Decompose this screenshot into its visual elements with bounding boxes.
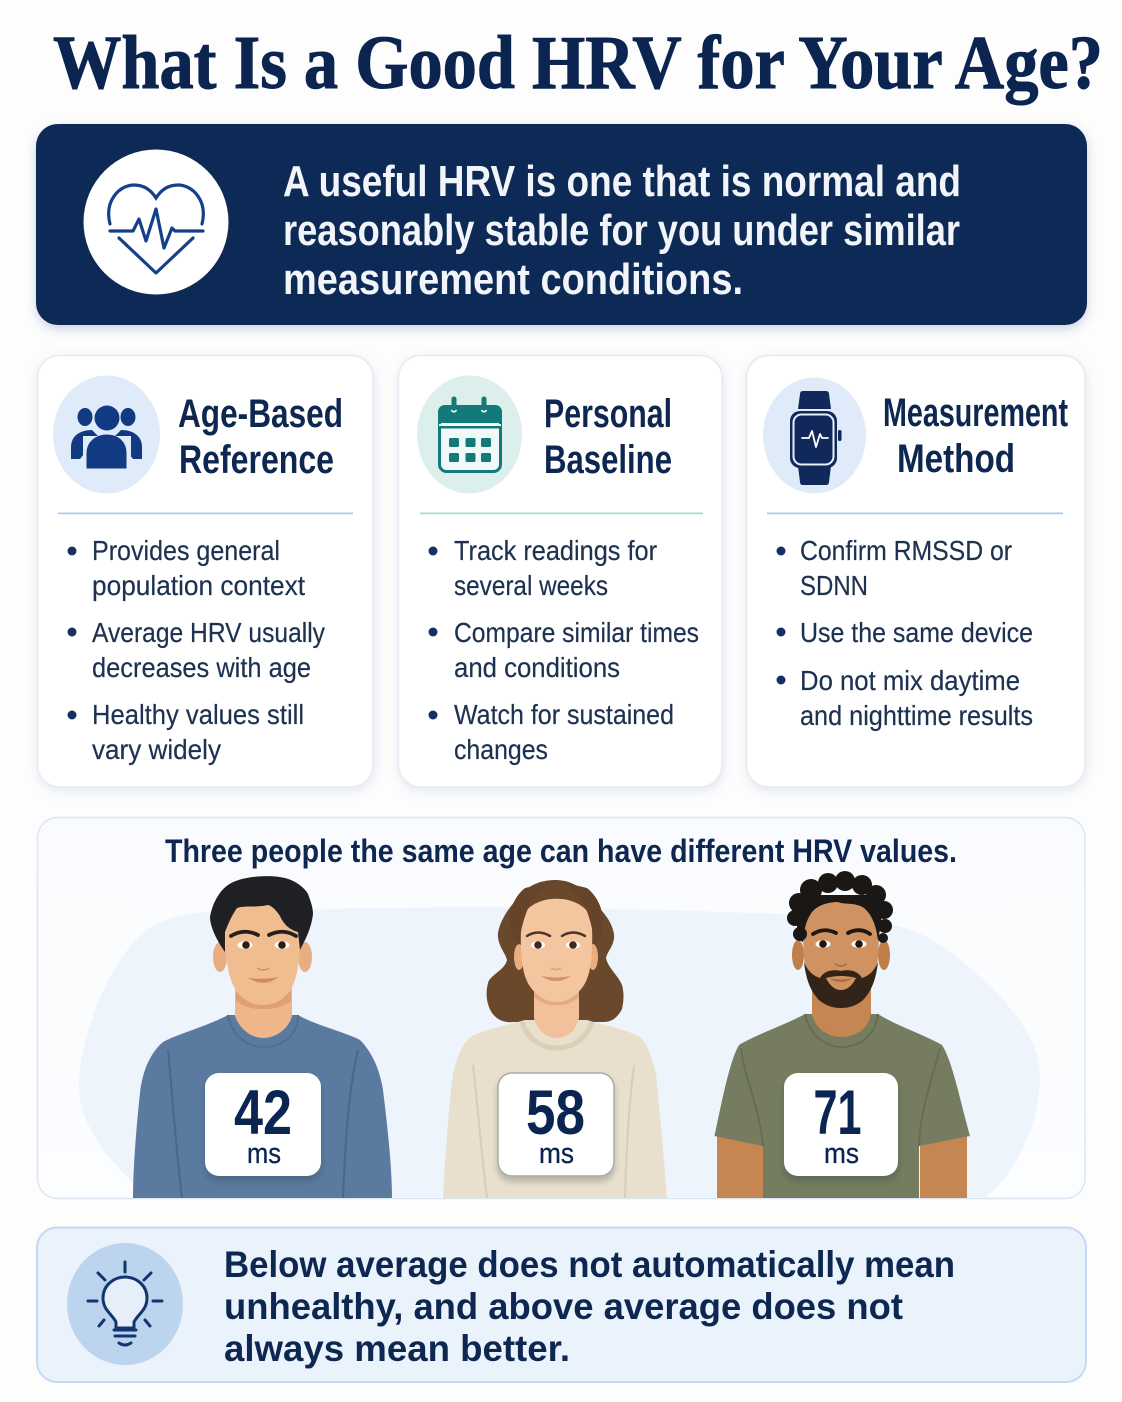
bullet list: Average HRV usually bbox=[92, 617, 325, 648]
hrv badge: 58 ms: 58 bbox=[526, 1078, 585, 1148]
key message text: A useful HRV is one that is normal and bbox=[283, 157, 961, 206]
hrv badge: 71 ms bbox=[784, 1073, 898, 1176]
takeaway text: unhealthy, and above average does not bbox=[224, 1286, 903, 1327]
heading: Three people the same age can have different HRV values. bbox=[165, 833, 957, 869]
key message text: reasonably stable for you under similar bbox=[283, 206, 960, 255]
panel: age-based reference bbox=[38, 356, 373, 787]
takeaway text: always mean better. bbox=[224, 1328, 570, 1369]
heading bbox=[178, 392, 343, 482]
panel: key message banner bbox=[36, 124, 1087, 325]
heading: Baseline bbox=[544, 438, 672, 482]
takeaway text bbox=[224, 1244, 955, 1369]
icon: calendar bbox=[417, 376, 522, 494]
icon: smartwatch bbox=[763, 378, 866, 494]
bullet list bbox=[68, 535, 325, 765]
icon: light bulb bbox=[67, 1243, 183, 1365]
bullet list: Compare similar times bbox=[454, 617, 699, 648]
hrv badge: 42 ms bbox=[205, 1073, 321, 1176]
bullet list: decreases with age bbox=[92, 652, 311, 683]
heading bbox=[544, 392, 672, 482]
heading: Age-Based bbox=[178, 392, 343, 436]
panel: personal baseline bbox=[398, 356, 722, 787]
heading: Personal bbox=[544, 392, 672, 436]
heading bbox=[883, 391, 1068, 481]
panel: three people comparison bbox=[38, 818, 1085, 1198]
bullet list: Healthy values still bbox=[92, 699, 304, 730]
icon: group of people bbox=[53, 376, 160, 494]
bullet list: several weeks bbox=[454, 570, 608, 601]
bullet list: Watch for sustained bbox=[454, 699, 674, 730]
bullet list: vary widely bbox=[92, 734, 221, 765]
takeaway text: Below average does not automatically mean bbox=[224, 1244, 955, 1285]
panel: takeaway callout bbox=[37, 1228, 1086, 1382]
hrv badge: 58 ms: ms bbox=[539, 1138, 574, 1170]
bullet list: Provides general bbox=[92, 535, 280, 566]
bullet list: changes bbox=[454, 734, 548, 765]
bullet list: Do not mix daytime bbox=[800, 665, 1020, 696]
key message text: measurement conditions. bbox=[283, 255, 743, 304]
panel: measurement method bbox=[746, 356, 1085, 787]
bullet list: and nighttime results bbox=[800, 700, 1033, 731]
hrv badge: 58 ms bbox=[498, 1073, 614, 1176]
person 2 bbox=[443, 880, 667, 1198]
bullet list bbox=[776, 535, 1033, 731]
hrv badge: 42 ms: ms bbox=[247, 1138, 281, 1170]
person 3 bbox=[714, 871, 970, 1198]
hrv badge: 71 ms: ms bbox=[824, 1138, 859, 1170]
bullet list bbox=[428, 535, 699, 765]
hrv badge: 71 ms: 71 bbox=[814, 1078, 862, 1148]
person 1 bbox=[133, 876, 392, 1198]
hrv badge: 42 ms: 42 bbox=[234, 1078, 292, 1148]
bullet list: Confirm RMSSD or bbox=[800, 535, 1012, 566]
heading: Reference bbox=[179, 438, 334, 482]
icon: heart with pulse bbox=[84, 150, 228, 294]
bullet list: SDNN bbox=[800, 570, 868, 601]
bullet list: Track readings for bbox=[454, 535, 657, 566]
heading: Method bbox=[897, 437, 1015, 481]
bullet list: population context bbox=[92, 570, 305, 601]
bullet list: Use the same device bbox=[800, 617, 1033, 648]
key message text bbox=[283, 157, 961, 304]
bullet list: and conditions bbox=[454, 652, 620, 683]
